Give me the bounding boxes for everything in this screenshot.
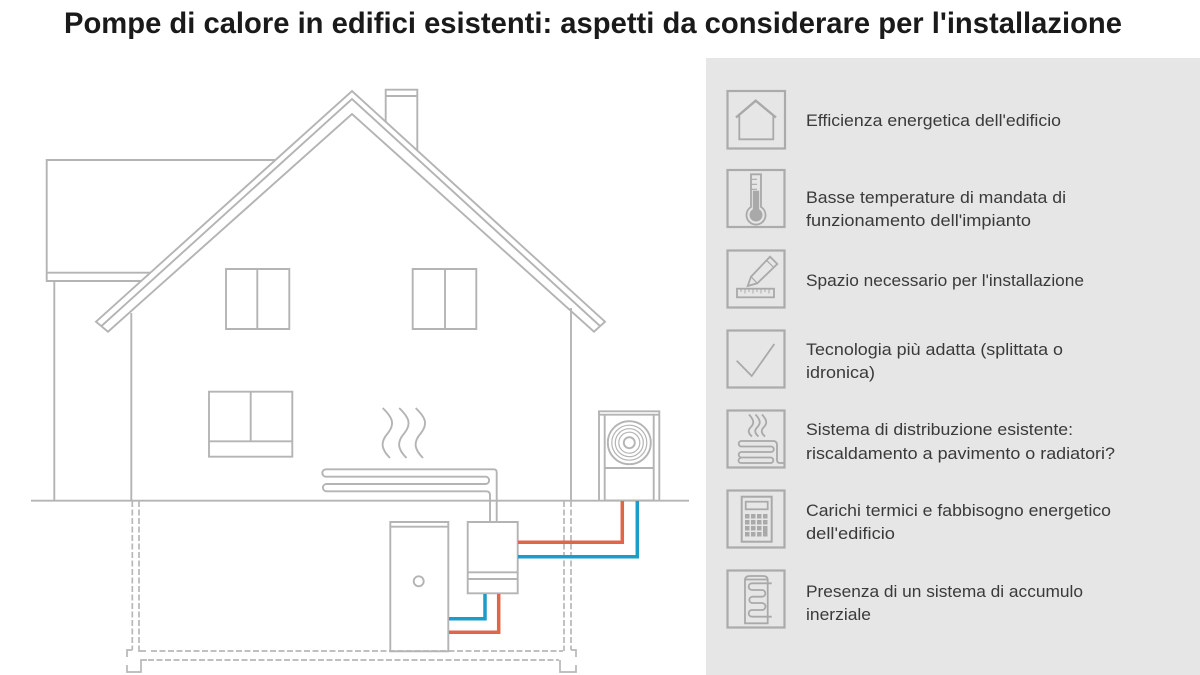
- text: storage system: Presenza di un sistema di accumulo: [806, 583, 1083, 601]
- window: upper right: [413, 269, 476, 329]
- item: low flow temperatures: [728, 170, 1066, 230]
- text: storage system: inerziale: [806, 606, 871, 624]
- text: low flow temperatures: Basse temperature di mandata di: [806, 189, 1066, 207]
- icon: thermometer: [728, 170, 784, 227]
- icon: pencil and ruler: [728, 250, 784, 308]
- text: existing distribution system: [806, 421, 1115, 463]
- text: thermal loads: dell'edificio: [806, 525, 895, 543]
- item: installation space: [728, 250, 1084, 308]
- icon: calculator: [728, 490, 784, 548]
- icon: check mark: [728, 330, 784, 388]
- window: upper left: [226, 269, 289, 329]
- blue pipe: outdoor unit to indoor unit: [518, 501, 637, 557]
- item: most suitable technology: [728, 330, 1063, 388]
- icon: house: [728, 91, 785, 148]
- item: existing distribution system: [728, 410, 1115, 468]
- text: installation space: Spazio necessario per l'installazione: [806, 272, 1084, 290]
- fan: [608, 421, 651, 464]
- text: most suitable technology: [806, 341, 1063, 382]
- item: thermal loads: [728, 490, 1111, 548]
- house illustration: [31, 90, 689, 672]
- red pipe: indoor unit to tank: [449, 594, 499, 632]
- roof: [96, 91, 605, 332]
- panel: aspects list: [706, 58, 1200, 675]
- outdoor heat pump unit: [599, 411, 659, 500]
- chimney: [386, 90, 417, 150]
- text: thermal loads: [806, 502, 1111, 543]
- indoor unit: [468, 522, 518, 593]
- blue pipe: indoor unit to tank: [449, 594, 485, 619]
- storage tank: [390, 522, 448, 651]
- text: low flow temperatures: funzionamento dell'impianto: [806, 212, 1031, 230]
- underfloor heating pipes: [322, 469, 497, 522]
- text: thermal loads: Carichi termici e fabbisogno energetico: [806, 502, 1111, 520]
- text: building energy efficiency: Efficienza energetica dell'edificio: [806, 112, 1061, 130]
- text: storage system: [806, 583, 1083, 624]
- icon: storage tank: [728, 570, 784, 628]
- red pipe: outdoor unit to indoor unit: [518, 501, 622, 542]
- text: existing distribution system: Sistema di distribuzione esistente:: [806, 421, 1073, 439]
- house walls: [131, 308, 571, 500]
- icon: underfloor heating: [728, 410, 784, 468]
- text: most suitable technology: Tecnologia più adatta (splittata o: [806, 341, 1063, 359]
- window: lower: [209, 392, 292, 457]
- text: most suitable technology: idronica): [806, 364, 875, 382]
- item: storage system: [728, 570, 1083, 628]
- ground line: [31, 500, 689, 502]
- side annex: [47, 160, 275, 500]
- title: Pompe di calore in edifici esistenti: aspetti da considerare per l'installazione: [64, 7, 1122, 40]
- heat waves: [383, 408, 425, 458]
- text: low flow temperatures: [806, 189, 1066, 230]
- item: building energy efficiency: [728, 91, 1061, 148]
- foundations: [127, 501, 576, 672]
- text: existing distribution system: riscaldamento a pavimento o radiatori?: [806, 445, 1115, 463]
